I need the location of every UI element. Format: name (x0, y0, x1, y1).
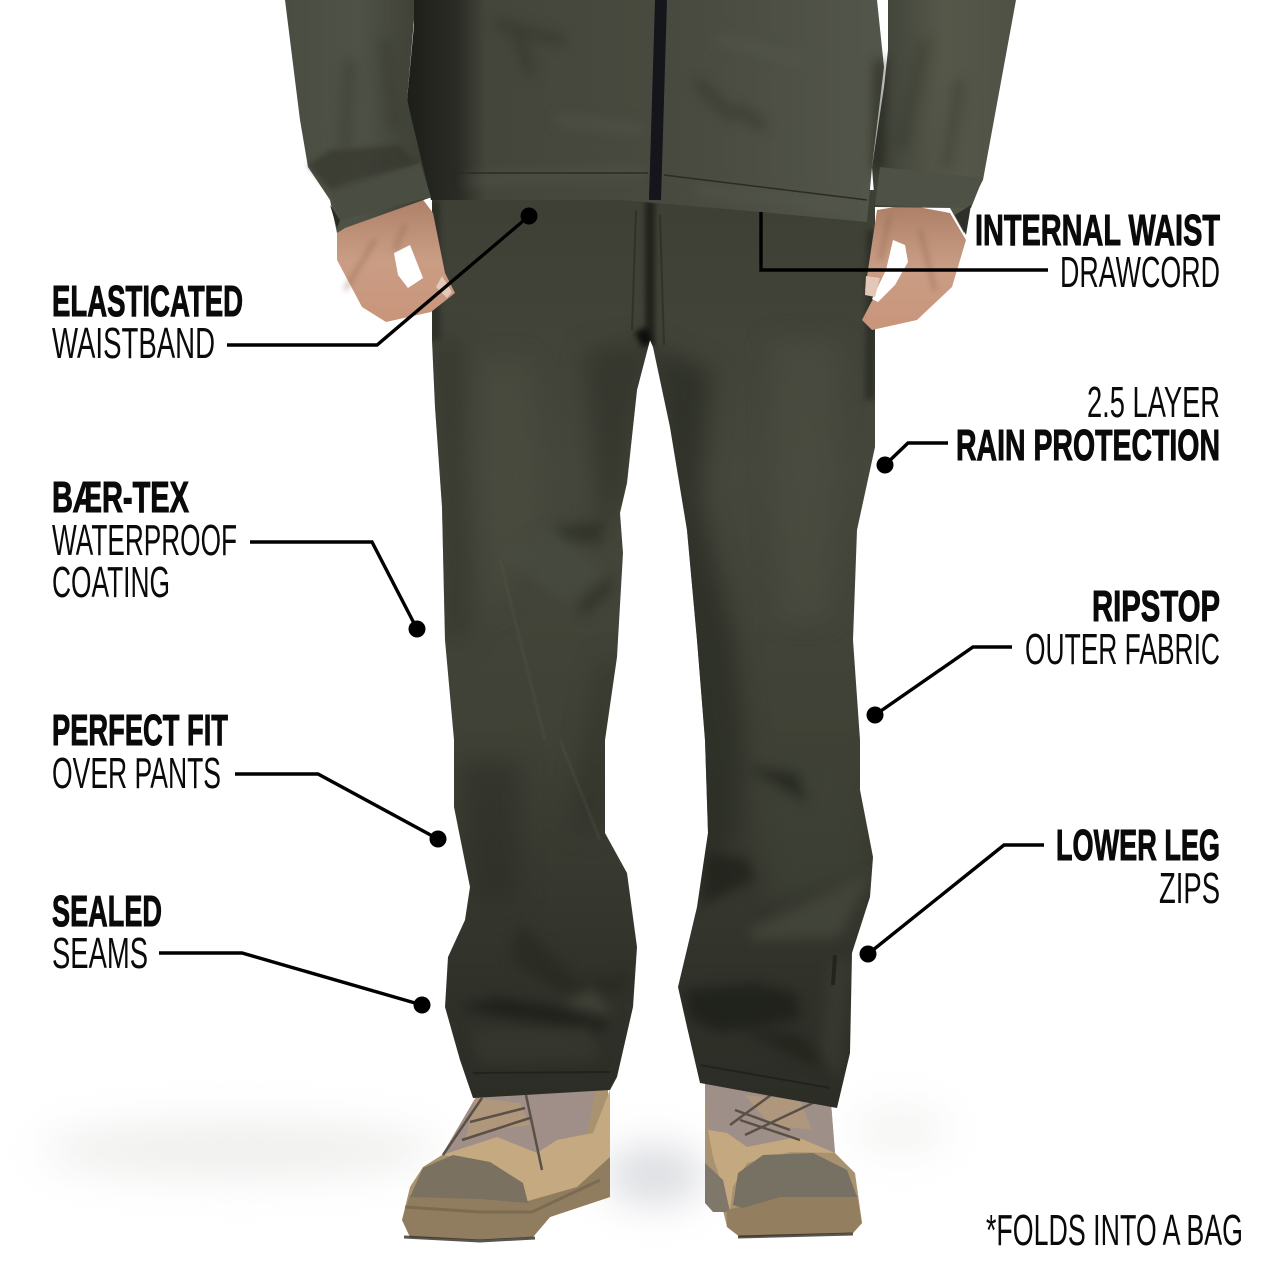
jacket hem stitch (457, 173, 867, 200)
pant folds (432, 200, 872, 1088)
callout: elasticated waistband (52, 208, 538, 368)
photo: hands (337, 197, 966, 330)
photo: rain pants (432, 190, 875, 1108)
left boot (402, 1085, 610, 1241)
right hand (862, 205, 966, 330)
left hand (337, 197, 455, 322)
callout: elasticated waistband: ELASTICATED (52, 277, 243, 326)
callout: sealed seams (52, 887, 430, 1014)
callout: baer-tex waterproof coating: BÆR-TEX (52, 473, 189, 522)
callout: ripstop outer fabric: RIPSTOP (1092, 582, 1220, 631)
callout: perfect fit over pants: OVER PANTS (52, 749, 221, 798)
callout: baer-tex waterproof coating: WATERPROOF (52, 516, 237, 565)
callout: lower leg zips (860, 821, 1220, 962)
callout: perfect fit over pants: PERFECT FIT (52, 706, 228, 755)
right sleeve (872, 0, 1016, 233)
photo: boots (402, 1075, 862, 1241)
left sleeve (285, 0, 432, 233)
callout: internal waist drawcord (761, 206, 1220, 297)
callout: baer-tex waterproof coating: COATING (52, 558, 170, 607)
callout: lower leg zips: ZIPS (1159, 864, 1220, 913)
torso (407, 0, 884, 222)
photo: jacket (285, 0, 1016, 235)
right boot (705, 1075, 862, 1237)
callout: baer-tex waterproof coating (52, 473, 426, 638)
cuffs (330, 163, 431, 220)
callout: elasticated waistband: WAISTBAND (52, 319, 215, 368)
sleeve folds (345, 40, 960, 170)
callout: ripstop outer fabric (866, 582, 1220, 724)
callout: sealed seams: SEAMS (52, 929, 148, 978)
callout: sealed seams: SEALED (52, 887, 162, 936)
ground shadow (40, 1105, 950, 1205)
callout: perfect fit over pants (52, 706, 446, 848)
callout: 2.5 layer rain protection (876, 378, 1220, 474)
jacket zipper (655, 0, 661, 200)
